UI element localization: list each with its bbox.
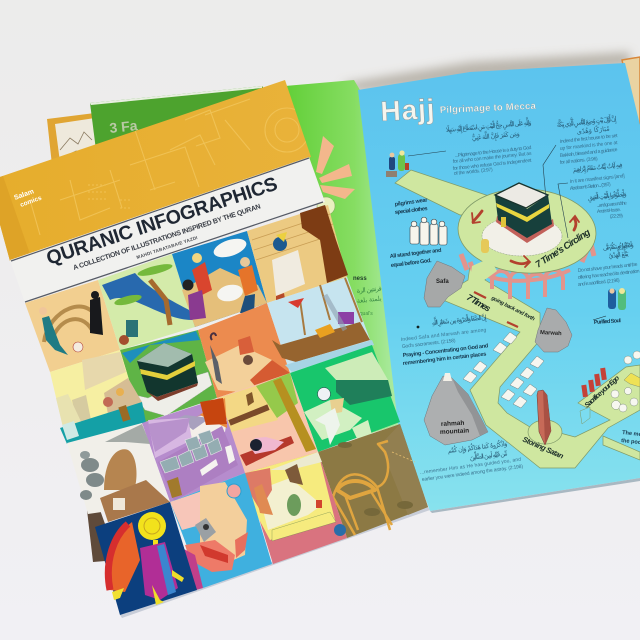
- robe: [140, 542, 178, 600]
- circular platform: [456, 185, 598, 277]
- label: 7 Times Circling: 7 Time's Circling: [534, 227, 593, 271]
- pilgrims at start: [386, 150, 409, 177]
- path labels: 7 times going back and forth: 7 Times: [465, 292, 493, 314]
- title: Hajj: Hajj: [380, 93, 435, 127]
- tile: tree landscape: [98, 254, 195, 350]
- rainbow wing: [108, 522, 140, 592]
- cover thickness: [120, 507, 430, 618]
- gold maqam: [481, 239, 489, 253]
- left page text: بلمتة بلغة: [356, 294, 382, 305]
- purified soul couple: [593, 288, 626, 326]
- arrows on path: [474, 292, 518, 327]
- icon: peach rays: [316, 136, 355, 199]
- block: pilgrims text: [390, 197, 442, 269]
- block: verse 3:97: for those who refuse God is Independent: [453, 158, 532, 172]
- label: sacrifice your ego: Sacrifice your Ego: [584, 374, 622, 409]
- block: Abraham's station: Abraham's Station ... (3:97): [570, 182, 611, 192]
- crowd: [135, 372, 212, 416]
- tile: egyptian scene: [247, 205, 348, 305]
- tile: camel: [318, 424, 428, 538]
- book cover: [0, 80, 428, 615]
- Marwah mountain: Marwah: [540, 330, 562, 337]
- left page text: فرتنتين الرة: [356, 284, 382, 295]
- tile: prayer rug: [217, 373, 318, 473]
- tile: purple house: [142, 398, 245, 502]
- kaaba with crowd: [482, 183, 562, 256]
- page edges at right: [622, 57, 640, 128]
- block: Abraham's station: [570, 160, 626, 192]
- block: do not shave: and is sacrificed. (2:196): [578, 278, 620, 288]
- block: remember him: مِّن قَبْلِهِ لَمِنَ الضَّالِّينَ: [469, 447, 508, 462]
- block: pilgrims text: equal before God.: [391, 258, 432, 269]
- block: Ancient House: [587, 188, 627, 220]
- tile: stained glass figure: [95, 502, 197, 615]
- publisher logo: [13, 188, 43, 209]
- block: do not shave: Do not shave your heads until the: [578, 262, 638, 274]
- rahmah mountain: mountain: [440, 427, 469, 436]
- crowd: [482, 216, 562, 256]
- map: green paths: [395, 170, 640, 468]
- block: remember him: وَاذْكُرُوهُ كَمَا هَدَاكُمْ وَإِن كُنتُم: [447, 439, 508, 456]
- block: verse 3:97: وَمَن كَفَرَ فَإِنَّ اللَّهَ غَنِيٌّ: [471, 127, 520, 143]
- title: Hajj: [380, 93, 537, 127]
- block: pilgrims text: pilgrims wear: [394, 197, 429, 208]
- tile: speech bubbles: [172, 231, 267, 327]
- block: verse 3:96: Bakkah, blessed and a guidance: [560, 147, 618, 159]
- tile: seated people: [25, 280, 120, 372]
- block: Safa and Marwah: [401, 311, 489, 367]
- block: Abraham's station: فِيهِ آيَاتٌ بَيِّنَاتٌ مَقَامُ إِبْرَاهِيمَ: [572, 160, 623, 175]
- author: MAHDI TABATABAIE YAZDI: [136, 235, 198, 260]
- block: remember him: [419, 439, 524, 483]
- block: verse 3:96: Indeed the first house to be set: [560, 133, 618, 145]
- title: QURANIC INFOGRAPHICS: [44, 173, 280, 270]
- left page text: [353, 276, 382, 317]
- block: Safa and Marwah: Praying - Concentrating on God and: [403, 343, 489, 359]
- block: Safa and Marwah: إِنَّ الصَّفَا وَالْمَرْوَةَ مِن شَعَائِرِ اللَّهِ: [431, 311, 487, 328]
- green book behind with heading: [90, 86, 290, 150]
- block: pilgrims text: special clothes: [395, 206, 428, 216]
- block: Ancient House: (22:29): [610, 213, 623, 220]
- block: verse 3:96: مُبَارَكًا وَهُدًى: [576, 123, 610, 136]
- block: do not shave: [578, 240, 640, 288]
- tile: ship: [267, 277, 374, 373]
- block: verse 3:97: ...Pilgrimage to the House is a duty to God: [455, 145, 532, 159]
- label: Stoning Satan: Stoning Satan: [521, 435, 565, 461]
- text: the meaning: [621, 430, 640, 446]
- block: verse 3:97: وَلِلَّهِ عَلَى النَّاسِ حِجُّ الْبَيْتِ مَنِ اسْتَطَاعَ إِلَيْهِ سَبِيلًا: [445, 116, 532, 135]
- dark book edge behind cover: [87, 510, 118, 562]
- path labels: 7 times going back and forth: [465, 292, 536, 323]
- white clad pilgrims: [410, 217, 447, 245]
- tile: kaaba: [120, 330, 217, 423]
- Safa mountain: Safa: [436, 279, 449, 285]
- left page text: equal's: [357, 311, 373, 317]
- block: verse 3:96: up for mankind is the one at: [560, 140, 618, 152]
- tents: [463, 332, 544, 408]
- tile: books desk: [290, 345, 400, 452]
- block: do not shave: offering has reached its destination: [578, 269, 640, 281]
- small lake: [580, 407, 590, 424]
- block: remember him: ...remember Him as He has guided you, and: [419, 457, 522, 476]
- block: do not shave: وَلَا تَحْلِقُوا رُءُوسَكُمْ حَتَّى: [602, 240, 634, 252]
- circuit pattern: [30, 99, 309, 240]
- yellow framed book behind: [47, 113, 110, 165]
- cream shape beside cover: [317, 197, 335, 215]
- block: do not shave: يَبْلُغَ الْهَدْيُ: [608, 248, 629, 260]
- block: pilgrims text: All stand together and: [390, 248, 442, 260]
- left page text: ness: [353, 276, 367, 282]
- right magazine page: blue: [358, 63, 640, 513]
- connector line from pilgrims: [408, 145, 568, 238]
- green book behind with heading: 3 Fa: [109, 117, 138, 136]
- publisher logo: comics: [19, 195, 43, 209]
- subtitle: A COLLECTION OF ILLUSTRATIONS INSPIRED BY THE QURAN: [72, 203, 262, 272]
- left magazine page: green: [285, 80, 400, 440]
- stoning satan circle and obelisk: [528, 390, 562, 445]
- arrows around kaaba: [472, 211, 579, 267]
- rahmah mountain: [424, 373, 488, 445]
- block: verse 3:96: [556, 112, 618, 166]
- cover yellow top: [0, 80, 311, 261]
- sheep and goat: [611, 351, 640, 412]
- rahmah mountain: rahmah: [441, 420, 465, 428]
- title: Hajj: Pilgrimage to Mecca: [440, 101, 537, 116]
- block: Abraham's station: In it are manifest signs [and]: [570, 173, 626, 185]
- tile: stairs room: [50, 350, 146, 444]
- block: remember him: earlier you were indeed among the astray. (2:198): [421, 464, 524, 483]
- Marwah mountain: [535, 308, 572, 352]
- block: Safa and Marwah: God's sacraments. (2:158): [402, 338, 456, 350]
- link between platform and path: [470, 258, 497, 279]
- publisher logo: Salam: [13, 188, 35, 202]
- block: Safa and Marwah: remembering him in certain places: [403, 352, 487, 367]
- block: verse 3:97: for all who can make the journey. But as: [453, 151, 532, 165]
- shadow above magazine: [340, 52, 630, 92]
- halo: [138, 512, 166, 540]
- purified soul couple: Purified Soul: [594, 318, 622, 326]
- tile: table room: [198, 303, 290, 398]
- block: verse 3:96: for all nations. (3:96): [560, 156, 598, 166]
- tile: mosque: [67, 423, 170, 522]
- base: [496, 216, 554, 243]
- block: verse 3:97: of the worlds. (3:97): [454, 167, 493, 177]
- red animals: [581, 368, 607, 397]
- tile: face with camera: [170, 473, 272, 590]
- title band: [10, 157, 325, 303]
- block: Ancient House: Ancient House.: [597, 207, 621, 215]
- block: verse 3:97: [445, 116, 532, 177]
- block: verse 3:96: إِنَّ أَوَّلَ بَيْتٍ وُضِعَ لِلنَّاسِ لَلَّذِي بِبَكَّةَ: [556, 112, 617, 130]
- path labels: 7 times going back and forth: going back and forth: [489, 295, 536, 323]
- arcade under platform: [461, 240, 594, 299]
- tile: christmas room: [245, 452, 347, 564]
- Safa mountain: [424, 261, 465, 307]
- block: Ancient House: وَلْيَطَّوَّفُوا بِالْبَيْتِ الْعَتِيقِ: [587, 188, 627, 203]
- block: Safa and Marwah: Indeed Safa and Marwah are among: [401, 327, 487, 343]
- block: Ancient House: ...and go around the: [597, 200, 627, 209]
